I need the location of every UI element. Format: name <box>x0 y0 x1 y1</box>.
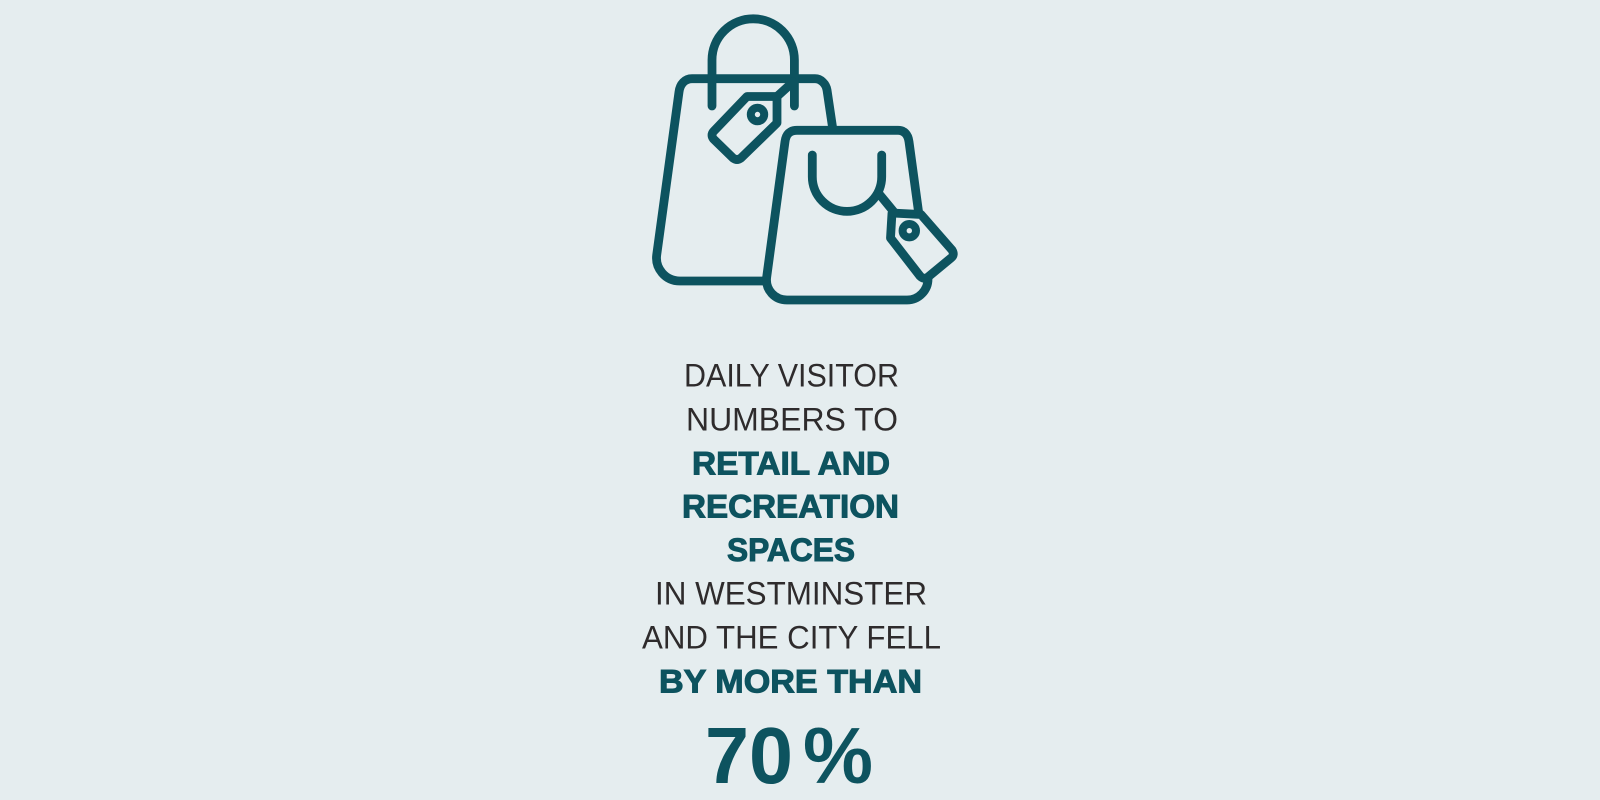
line: daily visitor: DAILY VISITOR <box>684 358 899 394</box>
right bag price tag <box>880 195 953 278</box>
figure: 70%: 70 <box>705 711 793 800</box>
line: numbers to: NUMBERS TO <box>686 402 898 438</box>
left bag price tag <box>712 82 793 160</box>
line: and the city fell: AND THE CITY FELL <box>642 620 941 656</box>
line: retail and: RETAIL AND <box>692 446 890 482</box>
right bag outline <box>767 130 928 300</box>
line: recreation: RECREATION <box>682 488 899 524</box>
line: by more than: BY MORE THAN <box>659 664 922 700</box>
left bag handle <box>712 19 794 106</box>
right bag handle <box>812 155 882 211</box>
figure: 70%: % <box>803 711 873 800</box>
line: in westminster: IN WESTMINSTER <box>655 576 927 612</box>
figure: 70% <box>705 711 873 800</box>
left bag outline <box>657 79 832 281</box>
icon: shopping bags with price tags <box>657 19 953 300</box>
line: spaces: SPACES <box>727 532 855 568</box>
text block: visitor numbers statement <box>642 358 941 800</box>
